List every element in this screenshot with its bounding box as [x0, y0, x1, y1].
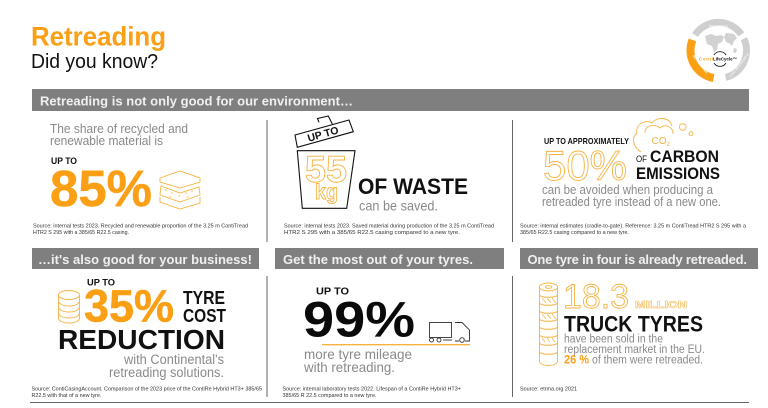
text: replacement market — [564, 333, 705, 367]
source note: Source: etrma.org 2021 — [520, 387, 577, 393]
panel: tyres heading: Get the most out of your tyres. — [283, 252, 473, 267]
source note: Source: ContiCasingAccount. Comparison of the 2023 price of the ContiRe Hybrid HT3+ 385/65 — [32, 387, 262, 393]
icon: ContiLifeCycle logo: NEW TYRES — [709, 24, 728, 28]
subtitle: Did you know? — [31, 51, 158, 73]
source note — [282, 387, 461, 399]
icon: truck — [430, 322, 470, 342]
text: can be avoided: can be avoided when producing a — [542, 183, 713, 197]
panel: carbon emissions — [520, 118, 746, 236]
text: more tyre mileage: more tyre mileage — [304, 346, 412, 362]
panel: business heading: …it's also good for your business! — [38, 252, 252, 267]
panel: one in four heading: One tyre in four is already retreaded. — [528, 252, 747, 267]
text: can be avoided — [542, 183, 721, 209]
text: share of recycled material: renewable material is — [50, 133, 163, 148]
source note: Source: internal tests 2023. Saved material during production of the 3.25 m ContiTread — [284, 224, 494, 230]
icon: CO2 cloud: CO — [652, 136, 666, 147]
source note: 385/65 R 22.5 compared to a new tyre. — [282, 393, 376, 399]
number: 18.3 million — [563, 278, 687, 316]
panel: truck tyres — [520, 278, 705, 393]
source note — [33, 224, 248, 236]
source note: R22.5 with that of a new tyre. — [32, 393, 102, 399]
road line — [322, 344, 470, 346]
source note: 385/65 R22.5 casing compared to a new tyre. — [520, 230, 629, 236]
source note: Source: internal estimates (cradle-to-gate). Reference: 3.25 m ContiTread HTR2 S 295 with a — [520, 224, 746, 230]
source note — [32, 387, 262, 399]
text: share of recycled material — [50, 121, 188, 148]
icon: tyre stack — [540, 283, 558, 366]
panel: cost reduction — [32, 278, 262, 399]
panel: recycled material — [33, 121, 248, 236]
label: up to: UP TO — [316, 285, 349, 297]
text: tyre cost: COST — [183, 306, 226, 326]
text: with Continental's retreading solutions — [109, 352, 224, 380]
label: up to: UP TO — [87, 278, 115, 289]
label: up to on lid: UP TO — [306, 124, 340, 145]
text: tyre cost: TYRE — [183, 288, 225, 308]
panel: business heading — [32, 248, 259, 269]
source note — [284, 224, 494, 236]
text: replacement market: replacement market in the EU. — [564, 344, 705, 356]
text: of carbon emissions: OF — [636, 154, 647, 164]
text: of carbon emissions — [636, 147, 720, 183]
text: tyre cost — [183, 288, 226, 326]
number: 18.3 million: MILLION — [635, 299, 687, 311]
number: 55 kg: 55 — [305, 149, 347, 190]
icon: ContiLifeCycle logo: LifeCycle™ — [713, 56, 737, 62]
icon: ContiLifeCycle logo: Conti — [699, 56, 713, 62]
title: Retreading — [31, 22, 166, 52]
source note: HTR2 S 295 with a 385/65 R22.5 casing compared to a new tyre. — [284, 230, 460, 236]
icon: material layers — [160, 171, 200, 209]
panel: tyre mileage — [282, 285, 470, 399]
source note: HTR2 S 295 with a 385/65 R22.5 casing. — [33, 230, 129, 236]
text: reduction: REDUCTION — [58, 324, 225, 355]
text: replacement market: have been sold in the — [564, 333, 663, 345]
text: more tyre mileage — [303, 346, 412, 375]
text: with Continental's retreading solutions: retreading solutions. — [109, 365, 224, 380]
number: 99%: 99% — [303, 292, 415, 348]
number: 50%: 50% — [543, 142, 627, 189]
label: up to approximately: UP TO APPROXIMATELY — [544, 136, 629, 146]
number: 85%: 85% — [50, 160, 152, 217]
panel: environment heading — [32, 89, 749, 111]
number: 35%: 35% — [84, 281, 174, 332]
source note: Source: internal laboratory tests 2022. Lifespan of a ContiRe Hybrid HT3+ — [282, 387, 461, 393]
number: 18.3 million: 18.3 — [563, 278, 629, 316]
source note: Source: internal tests 2023. Recycled and renewable proportion of the 3.25 m ContiTread — [33, 224, 248, 230]
panel: one in four heading — [520, 248, 758, 269]
text: can be avoided: retreaded tyre instead of a new one. — [542, 195, 721, 209]
text: can be saved: can be saved. — [359, 198, 438, 214]
text: of carbon emissions: EMISSIONS — [636, 164, 720, 183]
icon: ContiLifeCycle logo — [690, 22, 750, 79]
icon: bin with lid — [295, 116, 355, 208]
icon: CO2 cloud — [634, 118, 693, 152]
source note — [520, 224, 746, 236]
number: 55 kg: kg — [315, 181, 338, 204]
panel: environment heading: Retreading is not only good for our environment… — [40, 93, 353, 108]
text: of waste: OF WASTE — [358, 174, 468, 199]
icon: CO2 cloud: 2 — [666, 142, 670, 148]
text: share of recycled material: The share of recycled and — [50, 121, 188, 136]
panel: waste saved — [284, 116, 494, 236]
icon: coin stack — [58, 290, 80, 323]
text: of carbon emissions: CARBON — [650, 147, 719, 166]
text: with Continental's retreading solutions: with Continental's — [123, 352, 224, 367]
text: replacement market: of them were retreaded. — [592, 355, 703, 367]
panel: tyres heading — [275, 248, 504, 269]
text: replacement market: 26 % — [564, 355, 589, 367]
text: truck tyres: TRUCK TYRES — [564, 312, 703, 337]
icon: ContiLifeCycle logo: TYRE MANAGEMENT — [728, 52, 750, 79]
text: more tyre mileage: with retreading. — [303, 359, 395, 375]
icon: ContiLifeCycle logo: RETREADING — [692, 54, 709, 75]
label: up to: UP TO — [51, 156, 77, 166]
